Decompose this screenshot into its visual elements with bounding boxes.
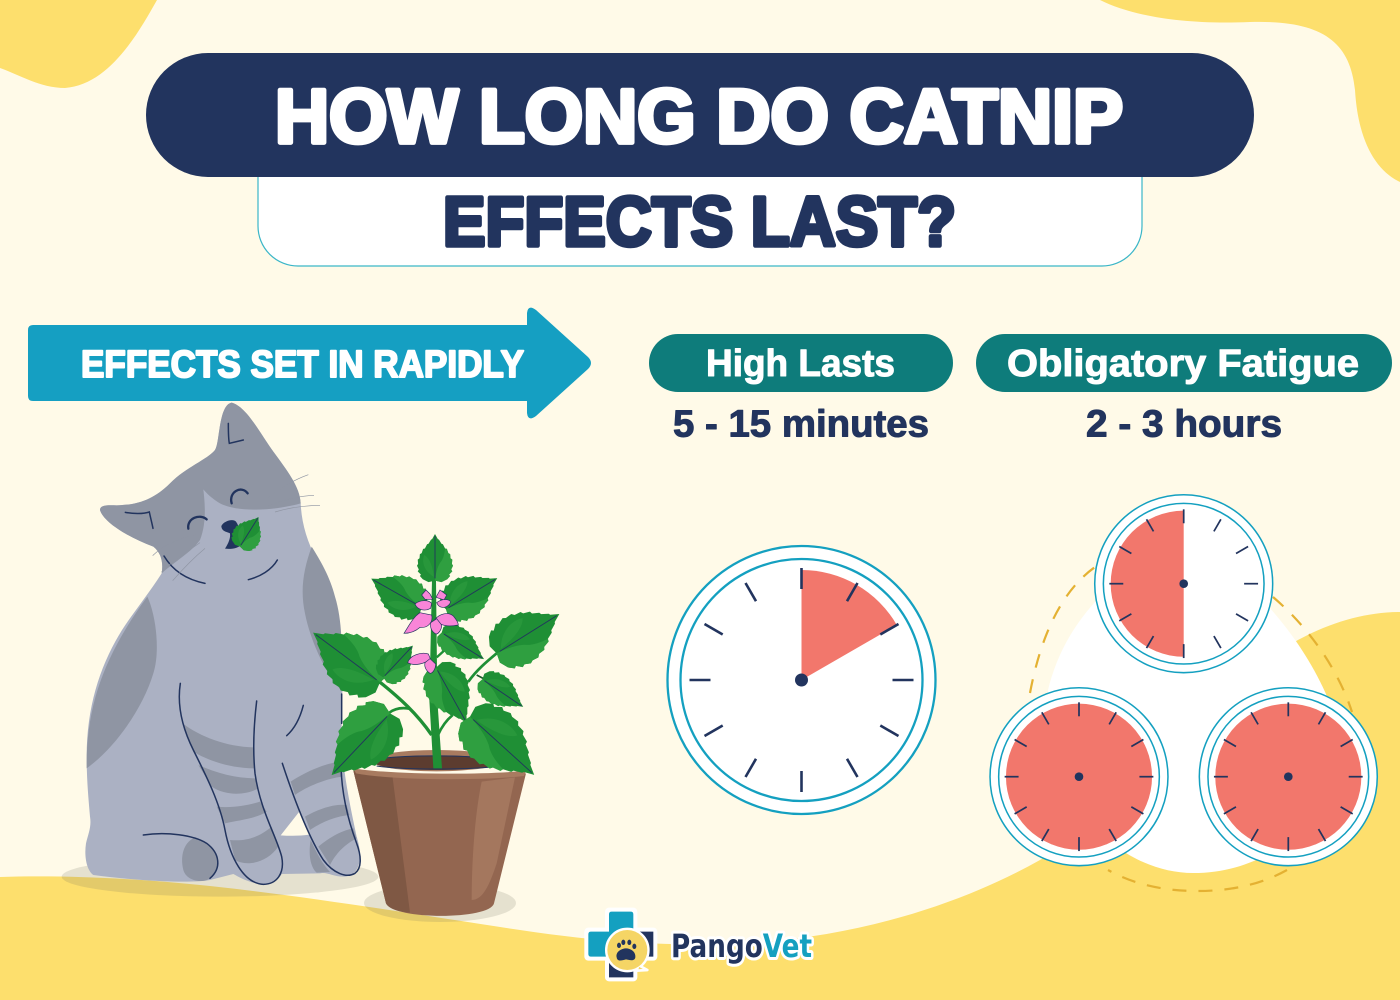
title upper pill [146,53,1254,177]
pot [353,750,526,916]
stems [379,580,497,768]
yellow ground wave [0,612,1400,1000]
cat dark head [100,403,301,573]
title line 1: HOW LONG DO CATNIP [275,75,1123,160]
arrow: effects set in rapidly: EFFECTS SET IN RAPIDLY [81,344,524,386]
title lower panel [258,170,1142,266]
clock: full hour right [1199,688,1377,866]
title block [146,53,1254,266]
text: 5 - 15 minutes: 5 - 15 minutes [673,404,929,446]
leaf on nose [227,509,271,555]
logo text: PangoVet [671,927,812,965]
pill: high lasts: High Lasts [706,343,895,385]
white rounded triangle backdrop [1047,540,1338,873]
pill: obligatory fatigue: Obligatory Fatigue [1007,343,1359,385]
clock group: 2 to 3 hours [990,495,1377,866]
pot body [353,771,526,916]
catnip plant in pot [295,534,574,916]
text: 2 - 3 hours: 2 - 3 hours [1086,404,1282,446]
yellow blob: top left [0,0,157,88]
cat dark patches [87,547,357,881]
logo cross [588,912,653,977]
whiskers [153,475,320,581]
title line 2: EFFECTS LAST? [443,182,956,260]
arrow: effects set in rapidly [28,308,591,418]
yellow blob: top right [1100,0,1400,182]
cat nose [221,520,242,549]
pot shadow [364,884,516,922]
leaves [295,534,574,797]
pill: obligatory fatigue [976,334,1392,392]
flowers [404,590,458,673]
clock: full hour left [990,688,1168,866]
pot opening [372,750,502,771]
gap between legs [281,812,309,836]
cat [62,403,378,897]
cat shadow [62,857,378,897]
clock: half hour [1095,495,1273,673]
pill: high lasts [649,334,953,392]
dashed rounded triangle outline [1030,565,1352,891]
logo: PangoVet [588,912,812,977]
paw [616,940,636,960]
cat body silhouette [85,403,360,885]
clock: 5 to 15 minutes [668,546,936,814]
cat outlines [125,423,360,884]
